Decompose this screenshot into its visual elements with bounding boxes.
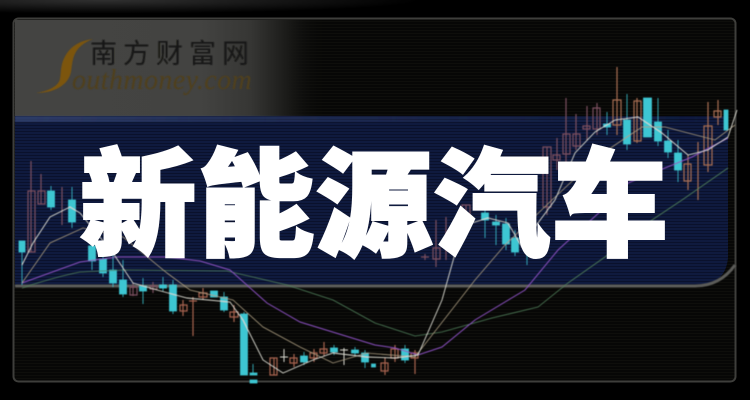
icon: logo swoosh	[36, 39, 93, 93]
moving average: purple	[22, 138, 728, 355]
moving average: white	[22, 110, 737, 373]
candles: white crosses	[280, 348, 348, 365]
logo Chinese name: 南方财富网	[90, 32, 255, 71]
candles: hollow red	[28, 67, 721, 375]
candles: solid cyan	[19, 94, 728, 383]
logo: southmoney	[36, 32, 255, 96]
panel: grey glow behind logo	[15, 20, 325, 116]
title: 新能源汽车	[80, 141, 670, 271]
candlestick chart	[19, 67, 737, 383]
moving average: tan	[22, 125, 735, 363]
moving average: green	[22, 168, 728, 336]
logo domain: outhmoney.com	[72, 65, 252, 96]
band border	[15, 265, 735, 286]
panel: blue band	[15, 116, 728, 286]
band highlight	[15, 116, 728, 122]
